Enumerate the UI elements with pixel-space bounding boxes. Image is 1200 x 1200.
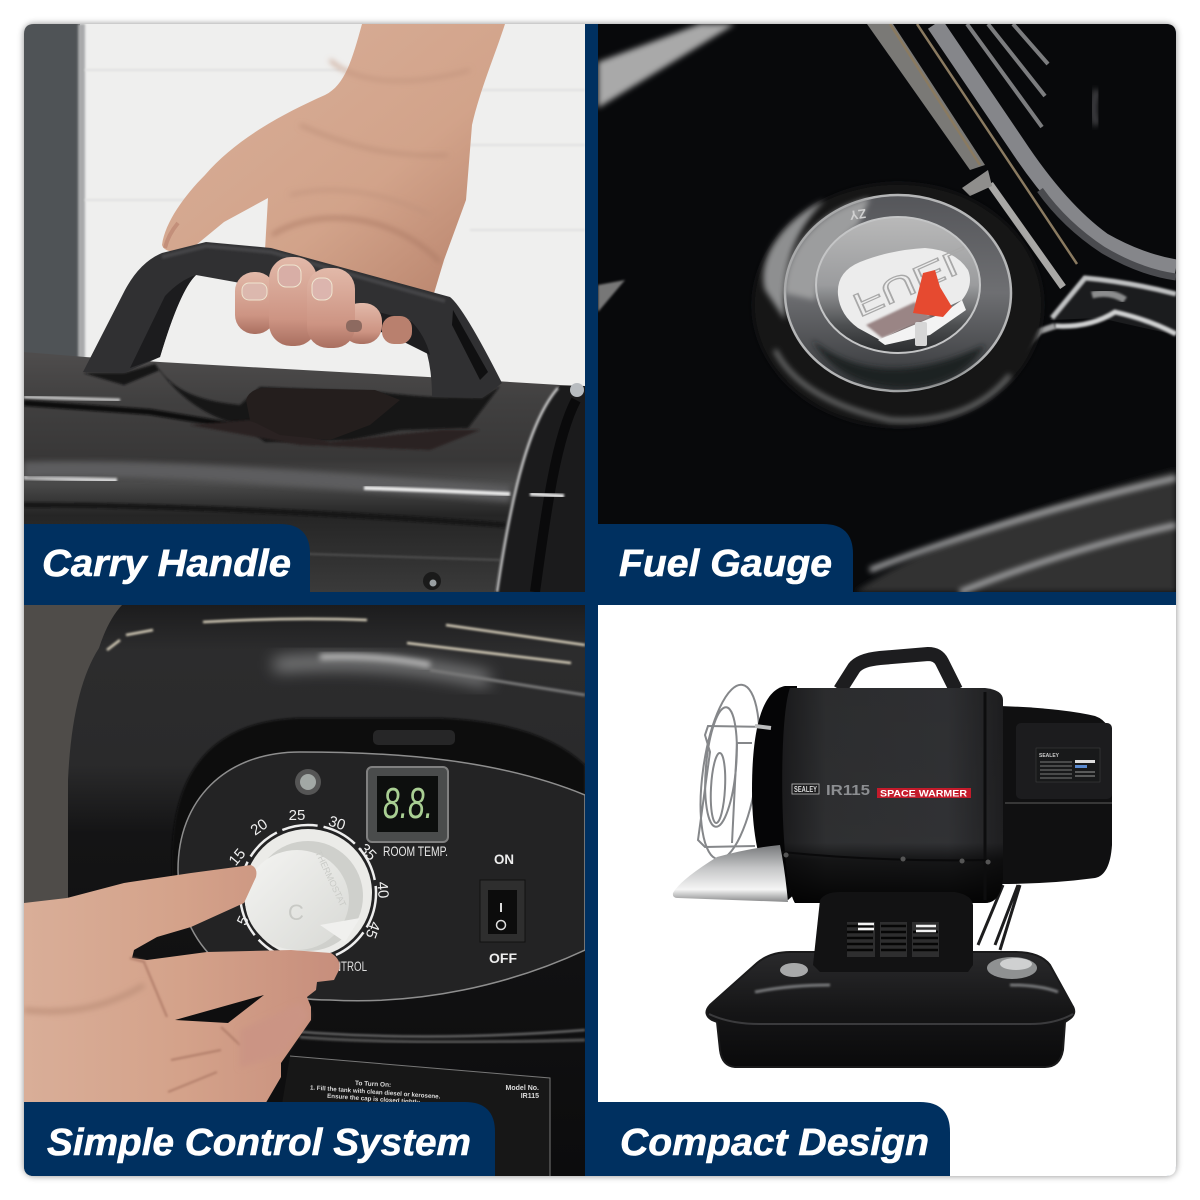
panel: compact design product bbox=[598, 605, 1176, 1176]
chrome deflector bbox=[673, 845, 788, 902]
indicator lamp bbox=[295, 769, 321, 795]
rating plate bbox=[1036, 748, 1100, 782]
temperature scale: 15 bbox=[226, 845, 249, 869]
model number: Model No. bbox=[506, 1085, 539, 1092]
temperature scale bbox=[226, 807, 392, 961]
instruction label: IR115 bbox=[521, 1093, 539, 1100]
carry handle grip bbox=[83, 242, 502, 398]
front ring bbox=[752, 686, 797, 900]
wall background bbox=[24, 24, 585, 424]
space warmer badge: SPACE WARMER bbox=[880, 788, 968, 798]
main cylinder bbox=[782, 688, 1003, 903]
instruction label bbox=[270, 1056, 550, 1176]
pedestal bbox=[813, 892, 973, 972]
heater body bbox=[24, 352, 585, 592]
label text: Fuel Gauge bbox=[619, 543, 832, 585]
thermostat knob: THERMOSTAT bbox=[313, 849, 348, 909]
off label: OFF bbox=[489, 950, 517, 966]
room temp label: ROOM TEMP. bbox=[383, 843, 448, 859]
control panel plate bbox=[178, 752, 585, 1001]
sealey badge bbox=[792, 784, 819, 794]
panel: fuel gauge photo bbox=[598, 24, 1176, 592]
panel: carry handle photo bbox=[24, 24, 585, 592]
heater front housing bbox=[68, 605, 585, 1176]
rivets bbox=[786, 855, 988, 862]
handle reflection bbox=[83, 364, 500, 442]
ring seam bbox=[495, 386, 585, 592]
label tab: simple control system bbox=[24, 1102, 495, 1176]
digital display bbox=[367, 767, 448, 842]
gauge moulded mark: ZY bbox=[848, 206, 867, 223]
thermostat knob: C bbox=[288, 900, 304, 925]
digital display: 8.8. bbox=[383, 779, 433, 828]
temperature scale: 35 bbox=[356, 840, 380, 864]
hand and forearm bbox=[162, 24, 505, 300]
label text: Simple Control System bbox=[47, 1122, 471, 1164]
label tab: fuel gauge bbox=[585, 524, 853, 592]
reflective highlights bbox=[598, 24, 1176, 592]
temperature scale: 25 bbox=[289, 807, 305, 824]
temperature scale: 30 bbox=[326, 813, 347, 834]
fingernails bbox=[242, 265, 362, 332]
carry handle bbox=[840, 654, 956, 690]
white fuel indicator bbox=[838, 248, 970, 346]
temperature scale: 40 bbox=[373, 881, 392, 899]
fingers under handle bbox=[235, 257, 412, 348]
wire guard bbox=[697, 684, 760, 859]
rear housing bbox=[1000, 706, 1112, 884]
label text: Compact Design bbox=[620, 1122, 929, 1164]
hand on dial bbox=[24, 865, 340, 1106]
label tab: compact design bbox=[585, 1102, 950, 1176]
temperature scale: 20 bbox=[248, 816, 271, 839]
instruction label: To Turn On: bbox=[355, 1080, 391, 1089]
control label: NTROL bbox=[334, 958, 367, 974]
instruction label: 1. Fill the tank with clean diesel or kerosene. bbox=[310, 1084, 441, 1101]
filler caps bbox=[780, 957, 1037, 979]
legs and cables bbox=[978, 885, 1020, 950]
fuel gauge dial bbox=[753, 183, 1043, 427]
label tab: carry handle bbox=[24, 524, 310, 592]
white fuel indicator: FUEL bbox=[847, 240, 976, 324]
instruction label: Ensure the cap is closed tightly. bbox=[327, 1093, 422, 1106]
model name: IR115 bbox=[826, 782, 870, 799]
space warmer heater bbox=[673, 654, 1112, 1067]
temperature scale: 5 bbox=[234, 913, 253, 928]
chrome trim lines bbox=[867, 24, 1176, 364]
label text: Carry Handle bbox=[42, 543, 291, 585]
rocker switch bbox=[480, 880, 525, 942]
panel: simple control system photo bbox=[24, 605, 585, 1176]
on label: ON bbox=[494, 851, 514, 867]
fuel tank bbox=[706, 952, 1074, 1067]
thermostat knob bbox=[244, 829, 372, 957]
rating plate: SEALEY bbox=[1039, 753, 1060, 759]
temperature scale: 45 bbox=[362, 919, 383, 941]
sealey badge: SEALEY bbox=[794, 785, 817, 794]
